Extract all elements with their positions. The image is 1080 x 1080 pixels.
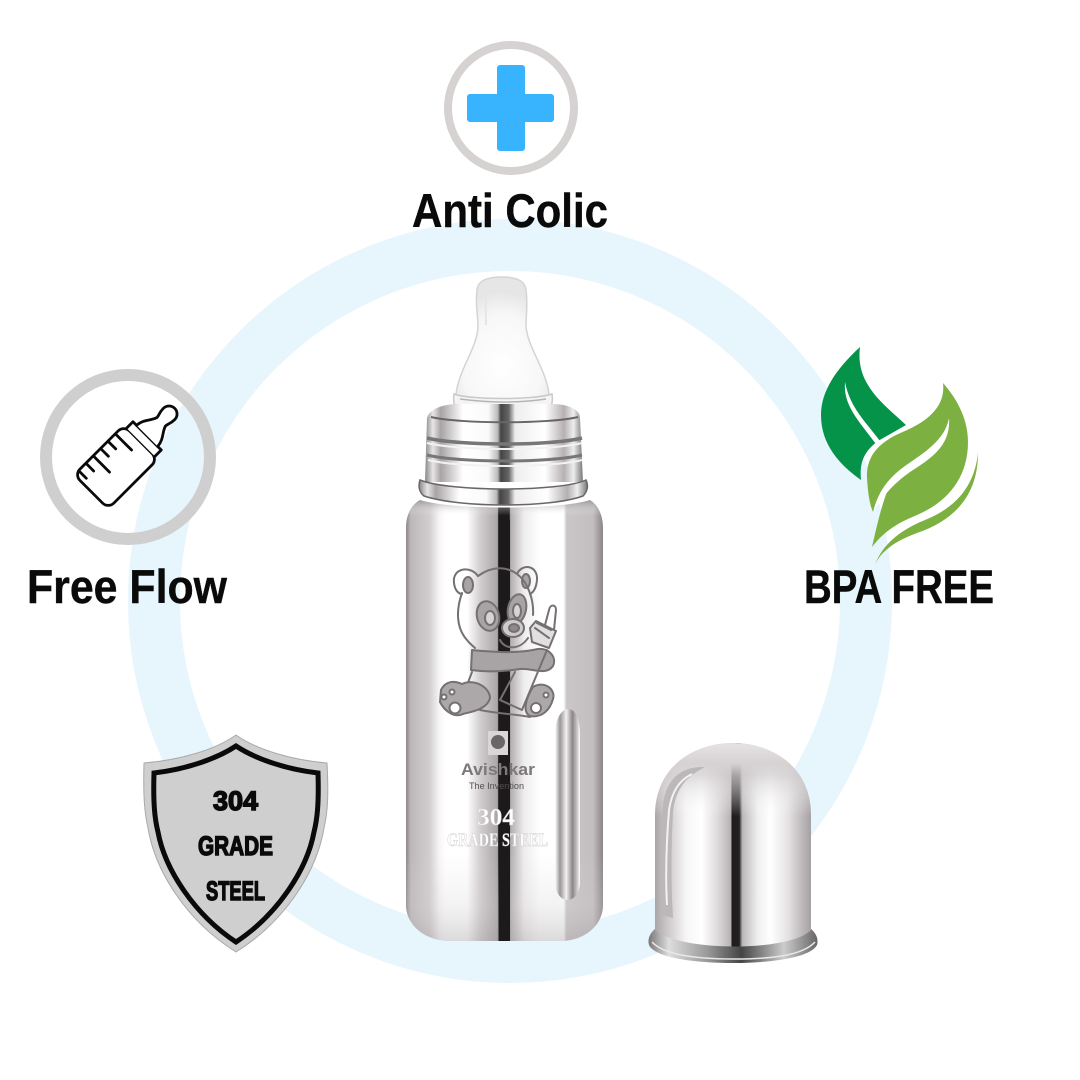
brand tagline: The Invention <box>469 781 524 791</box>
shield text <box>198 786 273 906</box>
icon: green leaves <box>821 347 978 565</box>
bottle body <box>406 500 603 941</box>
shield text: GRADE <box>198 831 273 861</box>
neck flange <box>419 480 587 505</box>
heading: BPA FREE: BPA FREE <box>804 560 994 613</box>
bottle side reflection <box>555 709 580 900</box>
engraved grade: GRADE STEEL <box>447 830 548 851</box>
bottle centre reflection stripe <box>499 520 510 941</box>
silicone teat <box>454 277 552 416</box>
shield text: 304 <box>213 786 258 816</box>
engraved grade <box>447 805 548 851</box>
panda engraving <box>440 567 556 717</box>
shield text: STEEL <box>206 876 265 906</box>
engraved grade: 304 <box>477 805 515 831</box>
icon: anti colic plus in circle <box>448 45 574 171</box>
brand name: Avishkar <box>461 760 535 779</box>
heading: Free Flow: Free Flow <box>27 560 227 613</box>
threaded neck <box>425 404 583 482</box>
icon: baby bottle in circle <box>46 375 210 539</box>
background ring <box>154 245 866 957</box>
heading: Anti Colic: Anti Colic <box>412 184 608 237</box>
product: steel baby bottle <box>406 277 603 941</box>
brand logo <box>488 731 508 755</box>
badge: 304 grade steel shield <box>144 735 328 952</box>
product: bottle cap <box>648 743 818 963</box>
